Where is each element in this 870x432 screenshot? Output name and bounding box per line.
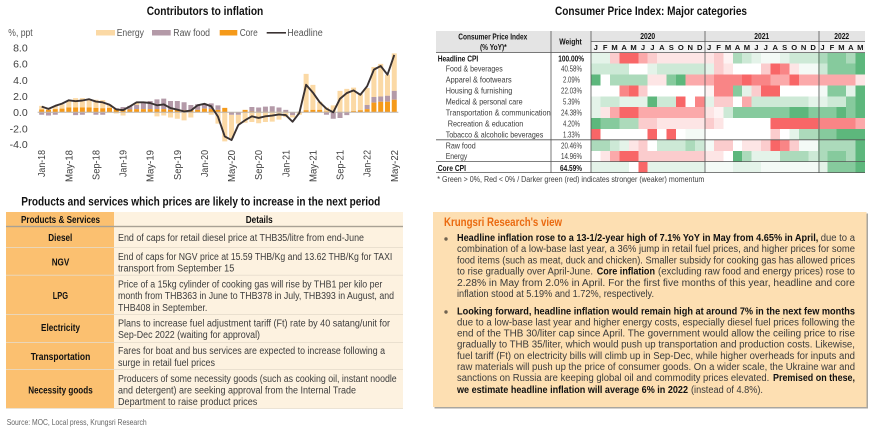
y axis labels: -2.0 [10, 123, 28, 135]
year headers: 2020 [640, 32, 656, 41]
year headers: 2021 [754, 32, 770, 41]
y axis labels: -4.0 [10, 139, 28, 151]
y axis labels [10, 42, 28, 151]
year headers: 2022 [834, 32, 850, 41]
bullet: looking forward: we estimate headline inflation will average 6% in 2022 [456, 385, 689, 396]
row labels [438, 54, 551, 173]
bullet: headline inflation: combination of a low-base last year, a 36% jump in retail fuel prices, and higher prices for some [457, 244, 856, 255]
legend: Raw food [173, 28, 210, 39]
x axis labels: Jan-19 [118, 150, 130, 177]
bullet: looking forward: end of the THB 30/liter cap since April. The government would allow the ceiling price to rise [457, 328, 856, 340]
product labels: LPG [53, 291, 68, 302]
bullet: headline inflation: food items (such as meat, duck and chicken). Smaller subsidy for cooking gas has allowed prices [457, 255, 855, 266]
chart title: Contributors to inflation [147, 4, 263, 18]
raw food bars [39, 91, 397, 119]
x axis labels: May-19 [145, 150, 157, 182]
bullet: looking forward: fuel tariff (Ft) on electricity bills will climb up in Sep-Dec, while higher overheads for inputs and [457, 351, 855, 362]
product labels: Transportation [31, 352, 90, 363]
weight values: 64.59% [560, 164, 583, 173]
weight values: 40.58% [561, 64, 582, 74]
row labels: Tobacco & alcoholic beverages [446, 130, 543, 140]
panel background [433, 212, 866, 407]
bullet: headline inflation: to rise gradually over April-June. [457, 266, 593, 278]
column header: consumer price index [458, 32, 528, 52]
row labels: Food & beverages [446, 64, 503, 74]
bullet: headline inflation: Core inflation [597, 266, 655, 278]
detail text: Sep-Dec 2022 (waiting for approval) [118, 330, 260, 341]
footnote: * Green > 0%, Red < 0% / Darker green (red) indicates stronger (weaker) momentum [437, 175, 704, 184]
legend: Core [240, 28, 258, 39]
y axis labels: 4.0 [13, 75, 28, 87]
year headers [640, 32, 850, 41]
y axis labels: 2.0 [13, 91, 28, 103]
row labels: Transportation & communication [446, 108, 551, 118]
weight values: 1.33% [563, 130, 580, 140]
bullet: headline inflation: due to a [821, 233, 856, 244]
table grid lines [436, 31, 865, 173]
x axis labels: Sep-19 [172, 150, 184, 180]
product labels: NGV [52, 258, 70, 268]
core bars [39, 100, 397, 112]
product labels: Electricity [41, 323, 80, 334]
detail text: month from THB363 in June to THB378 in July, THB393 in August, and [118, 291, 394, 302]
x axis labels: May-22 [389, 150, 401, 182]
row: transportation and communication [591, 107, 865, 118]
bullet: headline inflation: inflation stood at 5.19% and 1.72%, respectively. [457, 289, 654, 300]
bullet: looking forward: raw materials will push up the price of consumer goods. On a wider scale, the Ukraine war and [457, 362, 855, 373]
month headers: JFMAMJJASONDJFMAMJJASONDJFMAM [594, 43, 863, 52]
table header: Products & Services [21, 215, 100, 226]
x axis labels: Sep-20 [253, 150, 265, 180]
table header [21, 215, 273, 226]
bullet: headline inflation: (excluding raw food and energy prices) rose to [658, 266, 856, 278]
panel: consumer price index heat map [436, 4, 865, 184]
bullet: looking forward: due to a low-base last year and higher energy costs, especially diesel fuel prices following the [457, 317, 856, 328]
detail text: transport from September 15 [118, 264, 235, 274]
row: tobacco and alcoholic beverages [591, 129, 865, 140]
heat map title: Consumer Price Index: Major categories [555, 4, 747, 18]
column header: weight: Weight [559, 38, 582, 46]
x axis labels: May-21 [307, 150, 319, 182]
table backgrounds [6, 212, 403, 409]
bullet: headline inflation: Headline inflation rose to a 13-1/2-year high of 7.1% YoY in May from 4.65% in April, [457, 233, 819, 244]
bullet: looking forward: gradually to THB 35/liter, which would push up transportation and production costs. Likewise, [457, 340, 855, 351]
detail text: Plans to increase fuel adjustment tariff (Ft) rate by 40 satang/unit for [118, 318, 391, 330]
panel: products and services table [6, 194, 403, 427]
weight values [558, 54, 585, 173]
bullet: headline inflation: 2.28% in May from 2.0% in April. For the first five months of this year, headline and core [457, 278, 856, 289]
legend: Headline [287, 28, 323, 39]
row: headline CPI [591, 53, 865, 64]
weight values: 24.38% [561, 108, 582, 118]
x axis labels [36, 150, 401, 182]
row labels: Core CPI [438, 164, 466, 173]
row: housing and furnishing [619, 85, 865, 96]
source note: Source: MOC, Local press, Krungsri Research [7, 417, 147, 427]
heat map cells [591, 53, 865, 173]
y axis labels: 0.0 [13, 107, 28, 119]
legend [96, 28, 323, 39]
panel: contributors to inflation chart [8, 4, 401, 182]
bullet: headline inflation [444, 233, 856, 300]
detail text: Department to raise product prices [118, 397, 257, 408]
bullet: looking forward: Premised on these, [773, 373, 855, 384]
weight values: 20.46% [561, 142, 582, 150]
detail text [118, 233, 397, 408]
panel: Krungsri Research's view [433, 212, 868, 408]
detail text: Price of a 15kg cylinder of cooking gas will rise by THB1 per kilo per [118, 280, 383, 290]
row labels: Energy [446, 152, 468, 161]
row: core CPI [591, 162, 865, 173]
weight values: 22.03% [561, 86, 582, 96]
detail text: THB408 in September. [118, 303, 207, 314]
product labels [28, 233, 93, 396]
row labels: Headline CPI [438, 54, 478, 63]
product labels: Necessity goods [28, 386, 93, 396]
x axis labels: May-18 [63, 150, 75, 182]
weight values: 5.39% [563, 98, 580, 106]
x axis labels: Sep-18 [90, 150, 102, 180]
y axis unit: %, ppt [8, 28, 33, 39]
row: apparel and footwears [591, 74, 865, 85]
x axis labels: Sep-21 [334, 150, 346, 180]
weight values: 100.00% [558, 54, 585, 63]
product labels: Diesel [48, 233, 73, 244]
detail text: End of caps for NGV price at 15.59 THB/Kg and 13.62 THB/Kg for TAXI [118, 252, 392, 263]
energy bars [39, 53, 397, 141]
detail text: End of caps for retail diesel price at THB35/litre from end-June [118, 233, 365, 244]
bullet: looking forward: (instead of 4.8%). [691, 385, 763, 396]
row labels: Medical & personal care [446, 98, 523, 106]
row: energy [600, 151, 865, 162]
detail text: surge in retail fuel prices [118, 358, 215, 369]
bullet: looking forward [444, 306, 856, 396]
stacked bars and headline line [38, 53, 398, 141]
detail text: Producers of some necessity goods (such as cooking oil, instant noodle [118, 374, 397, 385]
row: recreation and education [591, 118, 865, 129]
panel shadow [434, 214, 868, 408]
detail text: and detergent) are seeking approval from the Internal Trade [118, 386, 357, 396]
x axis labels: Jan-18 [36, 150, 48, 177]
row: raw food [591, 140, 865, 151]
weight values: 2.09% [563, 76, 580, 84]
x axis labels: Jan-20 [199, 150, 211, 177]
row labels: Raw food [446, 142, 476, 150]
weight values: 14.96% [561, 152, 582, 161]
y axis labels: 8.0 [13, 42, 28, 54]
row labels: Apparel & footwears [446, 76, 512, 84]
row: food and beverages [591, 64, 865, 74]
table header: Details [246, 215, 273, 226]
row labels: Recreation & education [448, 120, 524, 128]
detail text: Fares for boat and bus services are expected to increase following a [118, 346, 385, 357]
y axis labels: 6.0 [13, 59, 28, 71]
column header: consumer price index: (% YoY)* [480, 43, 507, 52]
headline line [42, 55, 394, 140]
x axis labels: Jan-22 [362, 150, 374, 177]
table header background [436, 31, 865, 52]
table title: Products and services which prices are likely to increase in the next period [21, 194, 380, 208]
x axis labels: Jan-21 [280, 150, 292, 177]
bullet: looking forward: sanctions on Russia are keeping global oil and commodity prices elevated. [457, 373, 769, 384]
legend: Energy [117, 28, 144, 39]
panel heading: Krungsri Research's view [444, 217, 562, 229]
column header: consumer price index: Consumer Price Index [458, 32, 528, 42]
row: medical and personal care [591, 96, 865, 107]
weight values: 4.20% [563, 120, 580, 128]
row labels: Housing & furnishing [446, 86, 513, 96]
x axis labels: May-20 [226, 150, 238, 182]
bullet: looking forward: Looking forward, headline inflation would remain high at around 7% in the next few months [457, 306, 856, 318]
